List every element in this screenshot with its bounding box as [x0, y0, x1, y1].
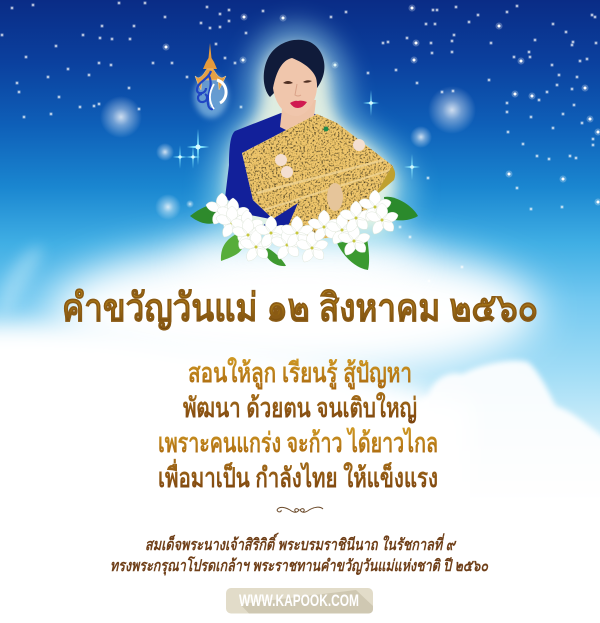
face — [273, 58, 317, 116]
starfield — [0, 1, 600, 283]
hair — [264, 40, 324, 97]
blurred light orbs — [100, 86, 476, 220]
gold shawl — [242, 114, 395, 240]
clouds — [0, 232, 600, 560]
portrait of Queen Sirikit — [225, 40, 395, 240]
website badge — [226, 588, 373, 614]
nose shadow — [295, 84, 301, 96]
jasmine garland — [190, 190, 418, 270]
royal emblem — [194, 43, 228, 118]
neck and chest — [280, 100, 316, 131]
blue jacket fold — [262, 203, 298, 226]
motto poem — [158, 357, 438, 493]
credit line 1: สมเด็จพระนางเจ้าสิริกิติ์ พระบรมราชินีนาถ ในรัชกาลที่ ๙ — [145, 532, 457, 554]
royal credit text — [110, 532, 489, 576]
line 4: เพื่อมาเป็น กำลังไทย ให้แข็งแรง — [158, 458, 438, 493]
portrait halo — [208, 24, 416, 245]
flowers — [206, 193, 238, 224]
website badge: WWW.KAPOOK.COM — [239, 591, 359, 610]
blue jacket — [225, 113, 322, 225]
credit line 2: ทรงพระกรุณาโปรดเกล้าฯ พระราชทานคำขวัญวันแม่แห่งชาติ ปี ๒๕๖๐ — [110, 556, 489, 576]
line 2: พัฒนา ด้วยตน จนเติบใหญ่ — [183, 392, 417, 424]
eyes and brows — [283, 80, 312, 84]
ornament divider — [277, 507, 323, 512]
line 3: เพราะคนแกร่ง จะก้าว ได้ยาวไกล — [158, 427, 438, 458]
mouth — [290, 101, 307, 108]
leaves — [190, 204, 224, 224]
twinkling star accents — [173, 90, 420, 180]
line 1: สอนให้ลูก เรียนรู้ สู้ปัญหา — [188, 357, 412, 390]
